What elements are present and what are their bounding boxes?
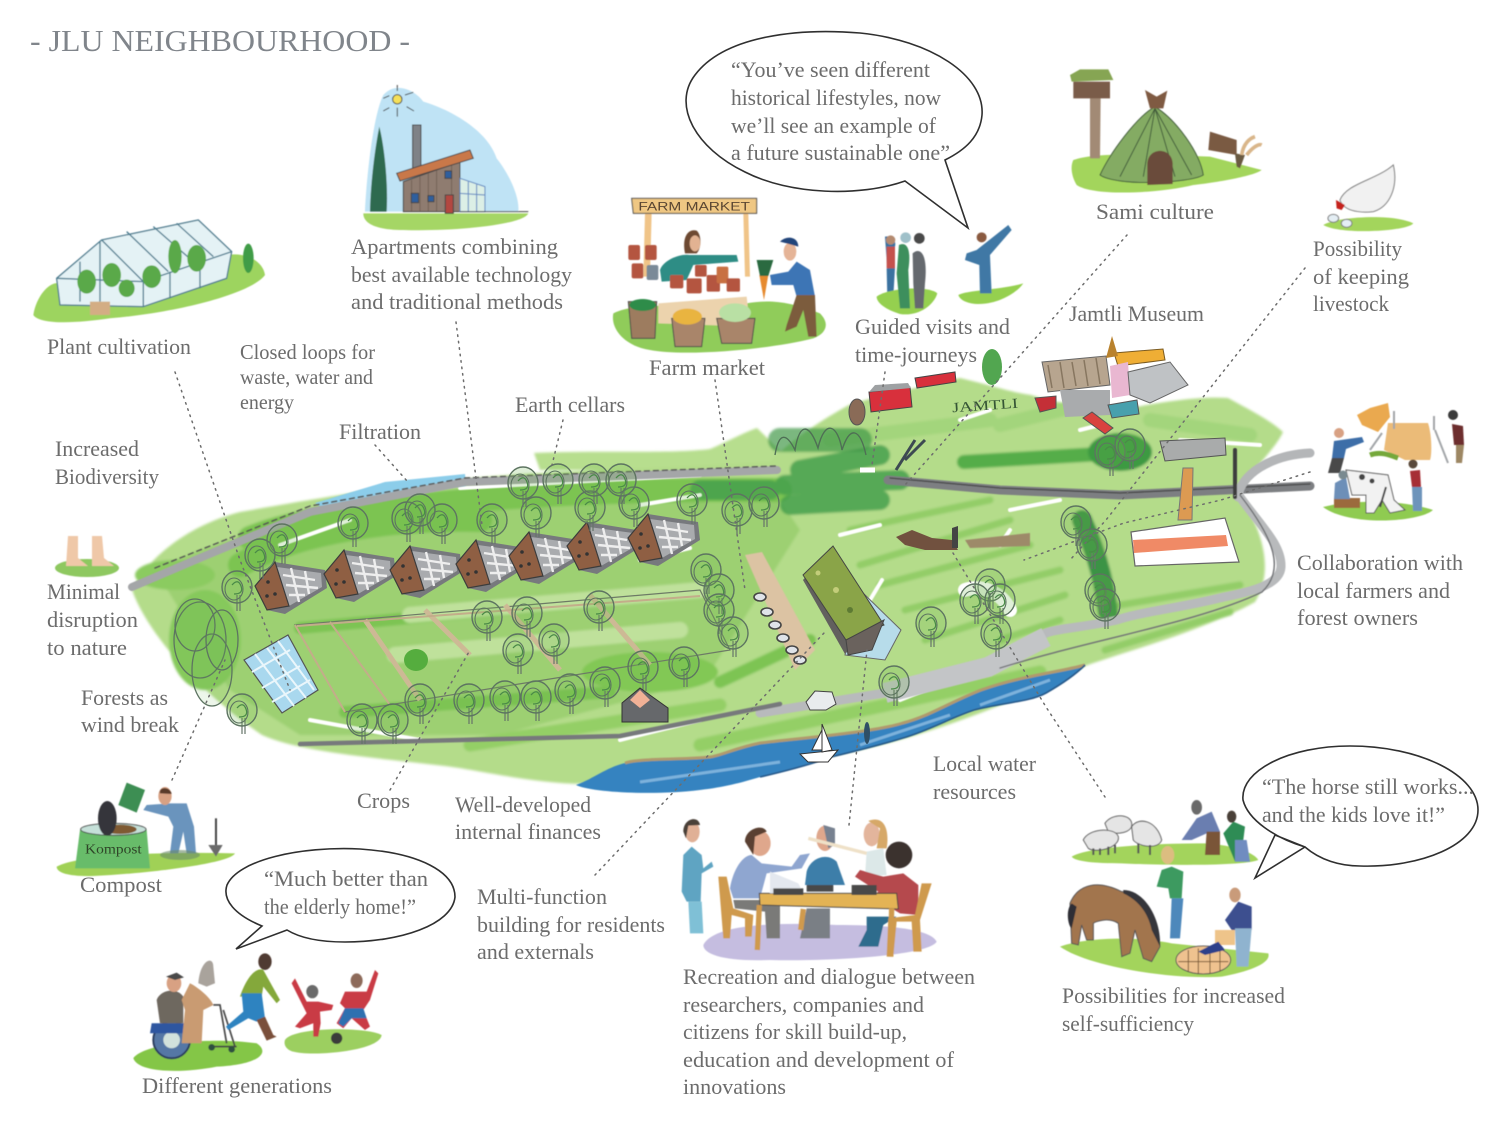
label: self-sufficiency: self-sufficiency	[1062, 1011, 1194, 1036]
title: - JLU NEIGHBOURHOOD -	[30, 23, 410, 58]
speech bubble: horse: and the kids love it!”	[1262, 802, 1445, 827]
small shed	[622, 688, 668, 722]
label: Closed loops: waste, water and	[240, 365, 373, 389]
label: Minimal disruption	[47, 579, 138, 660]
speech bubble: horse: “The horse still works...	[1262, 774, 1474, 799]
label: internal finances: internal finances	[455, 819, 601, 844]
label: Increased Biodiversity	[55, 436, 159, 489]
label: Closed loops	[240, 340, 375, 414]
green-roofed multi-function building	[803, 546, 901, 660]
land base painted in green	[132, 378, 1283, 784]
forest track and figures on hill	[860, 440, 925, 470]
label: Collaboration: Collaboration with	[1297, 550, 1463, 575]
speech bubble: future sustainable	[686, 32, 982, 228]
label: Recreation and dialogue: Recreation and dialogue between	[683, 964, 975, 989]
compost bin lettering: Kompost	[85, 842, 142, 857]
label: Plant cultivation: Plant cultivation	[47, 334, 191, 359]
label: internal finances	[455, 792, 601, 844]
label: Apartments: and traditional methods	[351, 289, 563, 314]
label: Multi-function building: and externals	[477, 939, 594, 964]
car on road	[806, 691, 836, 710]
label: Collaboration: forest owners	[1297, 605, 1418, 630]
illustration: bare feet	[55, 536, 119, 577]
label: Recreation and dialogue: researchers, companies and	[683, 992, 924, 1017]
label: Different generations: Different generations	[142, 1073, 332, 1098]
boats	[800, 722, 870, 762]
water: river	[576, 665, 1085, 793]
label: Possibility of keeping livestock	[1313, 236, 1409, 316]
speech bubble: future sustainable: we’ll see an example of	[731, 113, 937, 138]
speech bubble: future sustainable: “You’ve seen different	[731, 57, 930, 82]
illustration: hen and eggs	[1323, 165, 1413, 231]
label: Minimal disruption: Minimal	[47, 579, 120, 604]
label: Possibility of keeping livestock: livestock	[1313, 291, 1389, 316]
illustration: farm market	[613, 198, 1023, 353]
label: Multi-function building	[477, 884, 665, 964]
label: Recreation and dialogue	[683, 964, 975, 1099]
illustration: compost	[57, 783, 235, 876]
horse and plough	[896, 526, 1030, 550]
label: Forests as wind break	[81, 685, 179, 737]
illustration: greenhouse	[33, 220, 265, 322]
label: Local water: Local water	[933, 751, 1037, 776]
speech bubble: elderly home: “Much better than	[264, 866, 428, 891]
label: Multi-function building: Multi-function	[477, 884, 607, 909]
label: Apartments	[351, 234, 572, 314]
label: Sami culture: Sami culture	[1096, 199, 1214, 224]
label: Recreation and dialogue: innovations	[683, 1074, 786, 1099]
label: Collaboration	[1297, 550, 1463, 630]
farm field with orange path	[1131, 468, 1239, 566]
label: Recreation and dialogue: citizens for skill build-up,	[683, 1019, 907, 1044]
label: Local water	[933, 751, 1037, 804]
water: filtration ponds	[315, 474, 466, 510]
label: Increased Biodiversity: Biodiversity	[55, 464, 159, 489]
label: Collaboration: local farmers and	[1297, 578, 1450, 603]
label: Apartments: best available technology	[351, 262, 572, 287]
label: Local water: resources	[933, 779, 1016, 804]
illustration: Sami hut, tower and reindeer	[1070, 69, 1262, 193]
illustration: eco apartment with sun	[363, 85, 528, 230]
speech bubble: elderly home: the elderly home!”	[264, 894, 416, 919]
map: neighbourhood site plan	[132, 336, 1310, 793]
label: Guided visits: time-journeys	[855, 342, 977, 367]
label: Closed loops: Closed loops for	[240, 340, 375, 364]
speech bubble: horse	[1243, 746, 1478, 878]
label: Increased Biodiversity: Increased	[55, 436, 139, 461]
label: Closed loops: energy	[240, 390, 294, 414]
label: self-sufficiency: Possibilities for increased	[1062, 983, 1285, 1008]
illustration: sheep, horse and farmers	[1060, 800, 1269, 977]
label: Filtration: Filtration	[339, 419, 421, 444]
illustration: dialogue around a table	[682, 819, 937, 960]
label: Guided visits: Guided visits and	[855, 314, 1010, 339]
labels around the map	[47, 199, 1463, 1099]
label: Apartments: Apartments combining	[351, 234, 558, 259]
label: self-sufficiency	[1062, 983, 1285, 1036]
label: Crops: Crops	[357, 788, 410, 813]
speech bubble: future sustainable: historical lifestyles, now	[731, 85, 941, 110]
label: Forests as wind break: Forests as	[81, 685, 168, 710]
label: Forests as wind break: wind break	[81, 712, 179, 737]
label: Earth cellars: Earth cellars	[515, 392, 625, 417]
label: Recreation and dialogue: education and development of	[683, 1047, 955, 1072]
label: Farm market: Farm market	[649, 355, 765, 380]
label: Possibility of keeping livestock: of keeping	[1313, 264, 1409, 289]
paths between crop plots	[295, 590, 730, 712]
label: Minimal disruption: to nature	[47, 635, 127, 660]
market sign lettering: FARM MARKET	[638, 200, 751, 214]
trees across the site	[174, 428, 1145, 744]
leader lines	[172, 235, 1310, 875]
label: Minimal disruption: disruption	[47, 607, 138, 632]
label: Multi-function building: building for residents	[477, 912, 665, 937]
label: Jamtli Museum: Jamtli Museum	[1069, 301, 1204, 326]
white paint gaps	[280, 410, 1260, 740]
label: internal finances: Well-developed	[455, 792, 591, 817]
car park strip	[745, 552, 815, 670]
illustration: different generations	[133, 953, 382, 1071]
roads	[132, 450, 1310, 744]
illustration: cow and farmers	[1323, 403, 1464, 521]
greenhouse on site	[244, 635, 318, 713]
label: Compost: Compost	[80, 872, 162, 897]
Jamtli hill buildings: JAMTLI	[952, 397, 1019, 416]
speech bubble: future sustainable: a future sustainable one”	[731, 140, 950, 165]
label: Guided visits	[855, 314, 1010, 367]
Jamtli hill buildings	[849, 336, 1226, 461]
apartment buildings	[255, 514, 700, 614]
label: Possibility of keeping livestock: Possibility	[1313, 236, 1402, 261]
speech bubble: elderly home	[226, 849, 455, 949]
